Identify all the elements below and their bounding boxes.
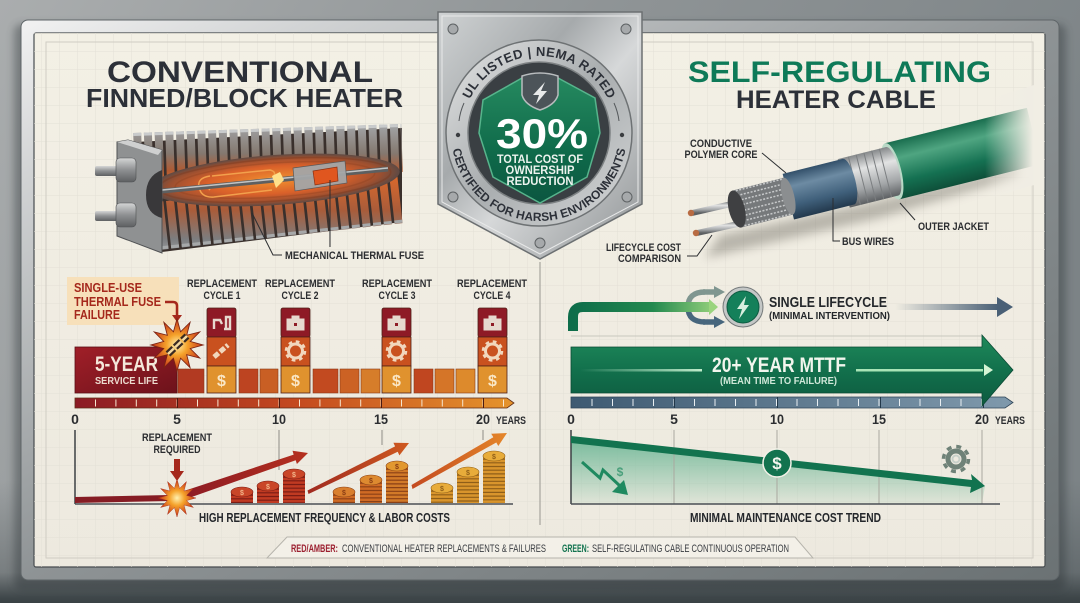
- replacement cycle 4: REPLACEMENT: [457, 278, 527, 290]
- label: bus wires: BUS WIRES: [842, 236, 894, 248]
- label: lifecycle cost comparison: LIFECYCLE COST: [606, 242, 681, 254]
- timeline: cable years axis: 10: [770, 411, 784, 427]
- label: replacement required: REPLACEMENT: [142, 432, 212, 444]
- panel: conventional heater: [67, 56, 527, 525]
- label: replacement required: REQUIRED: [154, 444, 201, 456]
- burst: replacement point: [158, 479, 196, 517]
- timeline: cable years axis: YEARS: [995, 415, 1025, 427]
- label: mechanical thermal fuse: MECHANICAL THERMAL FUSE: [285, 250, 424, 262]
- single lifecycle indicator: SINGLE LIFECYCLE: [769, 294, 887, 311]
- label: replacement required: [142, 432, 212, 481]
- cost arrow 2: [308, 443, 409, 494]
- callout: single-use thermal fuse failure: [67, 277, 182, 325]
- replacement cycle 2: CYCLE 2: [282, 290, 318, 302]
- screws: [448, 24, 632, 248]
- block: 5-year service life: 5-YEAR: [95, 353, 158, 376]
- icon: dollar coin: $: [772, 454, 782, 473]
- title: conventional: FINNED/BLOCK HEATER: [86, 83, 403, 113]
- coin stacks group 3: $: [466, 470, 470, 477]
- panel divider: [539, 262, 541, 525]
- replacement cycle 3: [362, 278, 432, 393]
- title: self-regulating: SELF-REGULATING: [688, 56, 991, 89]
- legend: SELF-REGULATING CABLE CONTINUOUS OPERATION: [592, 543, 789, 555]
- coin stacks group 2: $: [395, 464, 399, 471]
- replacement cycle 4: $: [488, 373, 497, 390]
- replacement cycle 3: $: [392, 373, 401, 390]
- legend: CONVENTIONAL HEATER REPLACEMENTS & FAILURES: [342, 543, 546, 555]
- label: bus wires: [833, 198, 894, 248]
- green shield: [479, 78, 600, 203]
- text: total cost of ownership reduction: OWNERSHIP: [506, 165, 575, 177]
- icon: gear: [944, 446, 968, 472]
- timeline: cable years axis: 20: [975, 411, 989, 427]
- label: conductive polymer core: [684, 138, 786, 173]
- replacement cycle 1: REPLACEMENT: [187, 278, 257, 290]
- replacement cycle 4: [457, 278, 527, 393]
- coin stacks group 3: [431, 451, 505, 503]
- replacement cycle 1: CYCLE 1: [204, 290, 240, 302]
- metal ring: [446, 40, 632, 226]
- chart: escalating replacement costs: [75, 430, 513, 525]
- text: total cost of ownership reduction: [497, 154, 583, 188]
- ring text: [453, 47, 625, 221]
- replacement cycle 3: CYCLE 3: [378, 290, 416, 302]
- illustration: finned heater block: [95, 126, 404, 253]
- replacement cycle 2: [265, 278, 335, 393]
- block: 5-year service life: [75, 347, 177, 393]
- timeline: conventional years axis: 0: [71, 411, 79, 427]
- text: total cost of ownership reduction: REDUCTION: [506, 176, 574, 188]
- metal plate: [438, 12, 642, 259]
- icon: fuse failure burst with broken link: [151, 319, 203, 371]
- replacement cycle 3: REPLACEMENT: [362, 278, 432, 290]
- label: conductive polymer core: POLYMER CORE: [684, 149, 758, 161]
- ring text: CERTIFIED FOR HARSH ENVIRONMENTS: [453, 148, 625, 221]
- caption: minimal maintenance: MINIMAL MAINTENANCE COST TREND: [690, 511, 881, 525]
- icon: falling cost arrow: $: [617, 465, 624, 479]
- label: conductive polymer core: CONDUCTIVE: [690, 138, 752, 150]
- timeline: conventional years axis: YEARS: [496, 415, 526, 427]
- coin stacks group 1: [231, 469, 305, 503]
- legend: GREEN:: [562, 543, 589, 555]
- timeline: cable years axis: 0: [567, 411, 575, 427]
- arrow: 20+ year MTTF: 20+ YEAR MTTF: [712, 354, 846, 377]
- timeline: conventional years axis: 20: [476, 411, 490, 427]
- replacement cycle 1: $: [217, 373, 226, 390]
- coin stacks group 1: $: [292, 472, 296, 479]
- single lifecycle indicator: (MINIMAL INTERVENTION): [769, 310, 890, 322]
- timeline: cable years axis: [567, 397, 1025, 427]
- coin stacks group 1: $: [240, 490, 244, 497]
- icon: falling cost arrow: [582, 462, 628, 495]
- timeline: conventional years axis: 10: [272, 411, 286, 427]
- replacement cycle 2: REPLACEMENT: [265, 278, 335, 290]
- title: conventional: [86, 56, 403, 113]
- ring text: UL LISTED | NEMA RATED: [462, 47, 614, 98]
- caption: high replacement frequency: HIGH REPLACEMENT FREQUENCY & LABOR COSTS: [199, 511, 450, 525]
- callout: single-use thermal fuse failure: THERMAL FUSE: [74, 294, 161, 309]
- label: outer jacket: [900, 203, 989, 233]
- coin stacks group 2: $: [369, 478, 373, 485]
- coin stacks group 2: [333, 461, 408, 503]
- text: total cost of ownership reduction: TOTAL COST OF: [497, 154, 583, 166]
- legend: RED/AMBER:: [291, 543, 338, 555]
- replacement cycle 1: [187, 278, 257, 393]
- legend: [267, 537, 813, 558]
- icon: dollar coin: [763, 449, 791, 477]
- single lifecycle indicator: [573, 286, 1013, 331]
- illustration: heater cable cutaway: [688, 80, 1044, 258]
- timeline: conventional years axis: 5: [173, 411, 181, 427]
- block: 5-year service life: SERVICE LIFE: [95, 376, 158, 387]
- callout: single-use thermal fuse failure: FAILURE: [74, 307, 120, 322]
- label: lifecycle cost comparison: [606, 235, 712, 265]
- inner dark disc: [468, 62, 610, 204]
- callout: single-use thermal fuse failure: SINGLE-USE: [74, 280, 142, 295]
- replacement cycle 2: $: [291, 373, 300, 390]
- timeline: conventional years axis: [71, 398, 526, 427]
- arrow: 20+ year MTTF: [571, 335, 1013, 406]
- badge: 30% total cost of ownership reduction: [437, 11, 643, 260]
- label: mechanical thermal fuse: [252, 180, 424, 262]
- timeline: cable years axis: 15: [872, 411, 886, 427]
- label: outer jacket: OUTER JACKET: [918, 221, 989, 233]
- timeline: cable years axis: 5: [670, 411, 678, 427]
- cost arrow 3: [412, 433, 507, 489]
- arrow: 20+ year MTTF: (MEAN TIME TO FAILURE): [720, 375, 837, 387]
- coin stacks group 1: $: [266, 484, 270, 491]
- replacement filler blocks: [178, 369, 475, 393]
- panel: self-regulating cable: [567, 56, 1044, 525]
- icon: small lightning shield: [522, 73, 558, 110]
- coin stacks group 3: $: [440, 486, 444, 493]
- coin stacks group 3: $: [492, 454, 496, 461]
- label: lifecycle cost comparison: COMPARISON: [618, 253, 681, 265]
- cost arrow 1: [75, 451, 308, 503]
- timeline: conventional years axis: 15: [374, 411, 388, 427]
- chart: minimal maintenance trend: [571, 430, 1000, 525]
- replacement cycle 4: CYCLE 4: [474, 290, 511, 302]
- title: self-regulating: HEATER CABLE: [736, 86, 936, 114]
- title: conventional: CONVENTIONAL: [107, 56, 373, 89]
- trend arrow: [571, 436, 985, 493]
- text: 30%: 30%: [496, 110, 588, 157]
- title: self-regulating: [688, 56, 991, 114]
- coin stacks group 2: $: [342, 490, 346, 497]
